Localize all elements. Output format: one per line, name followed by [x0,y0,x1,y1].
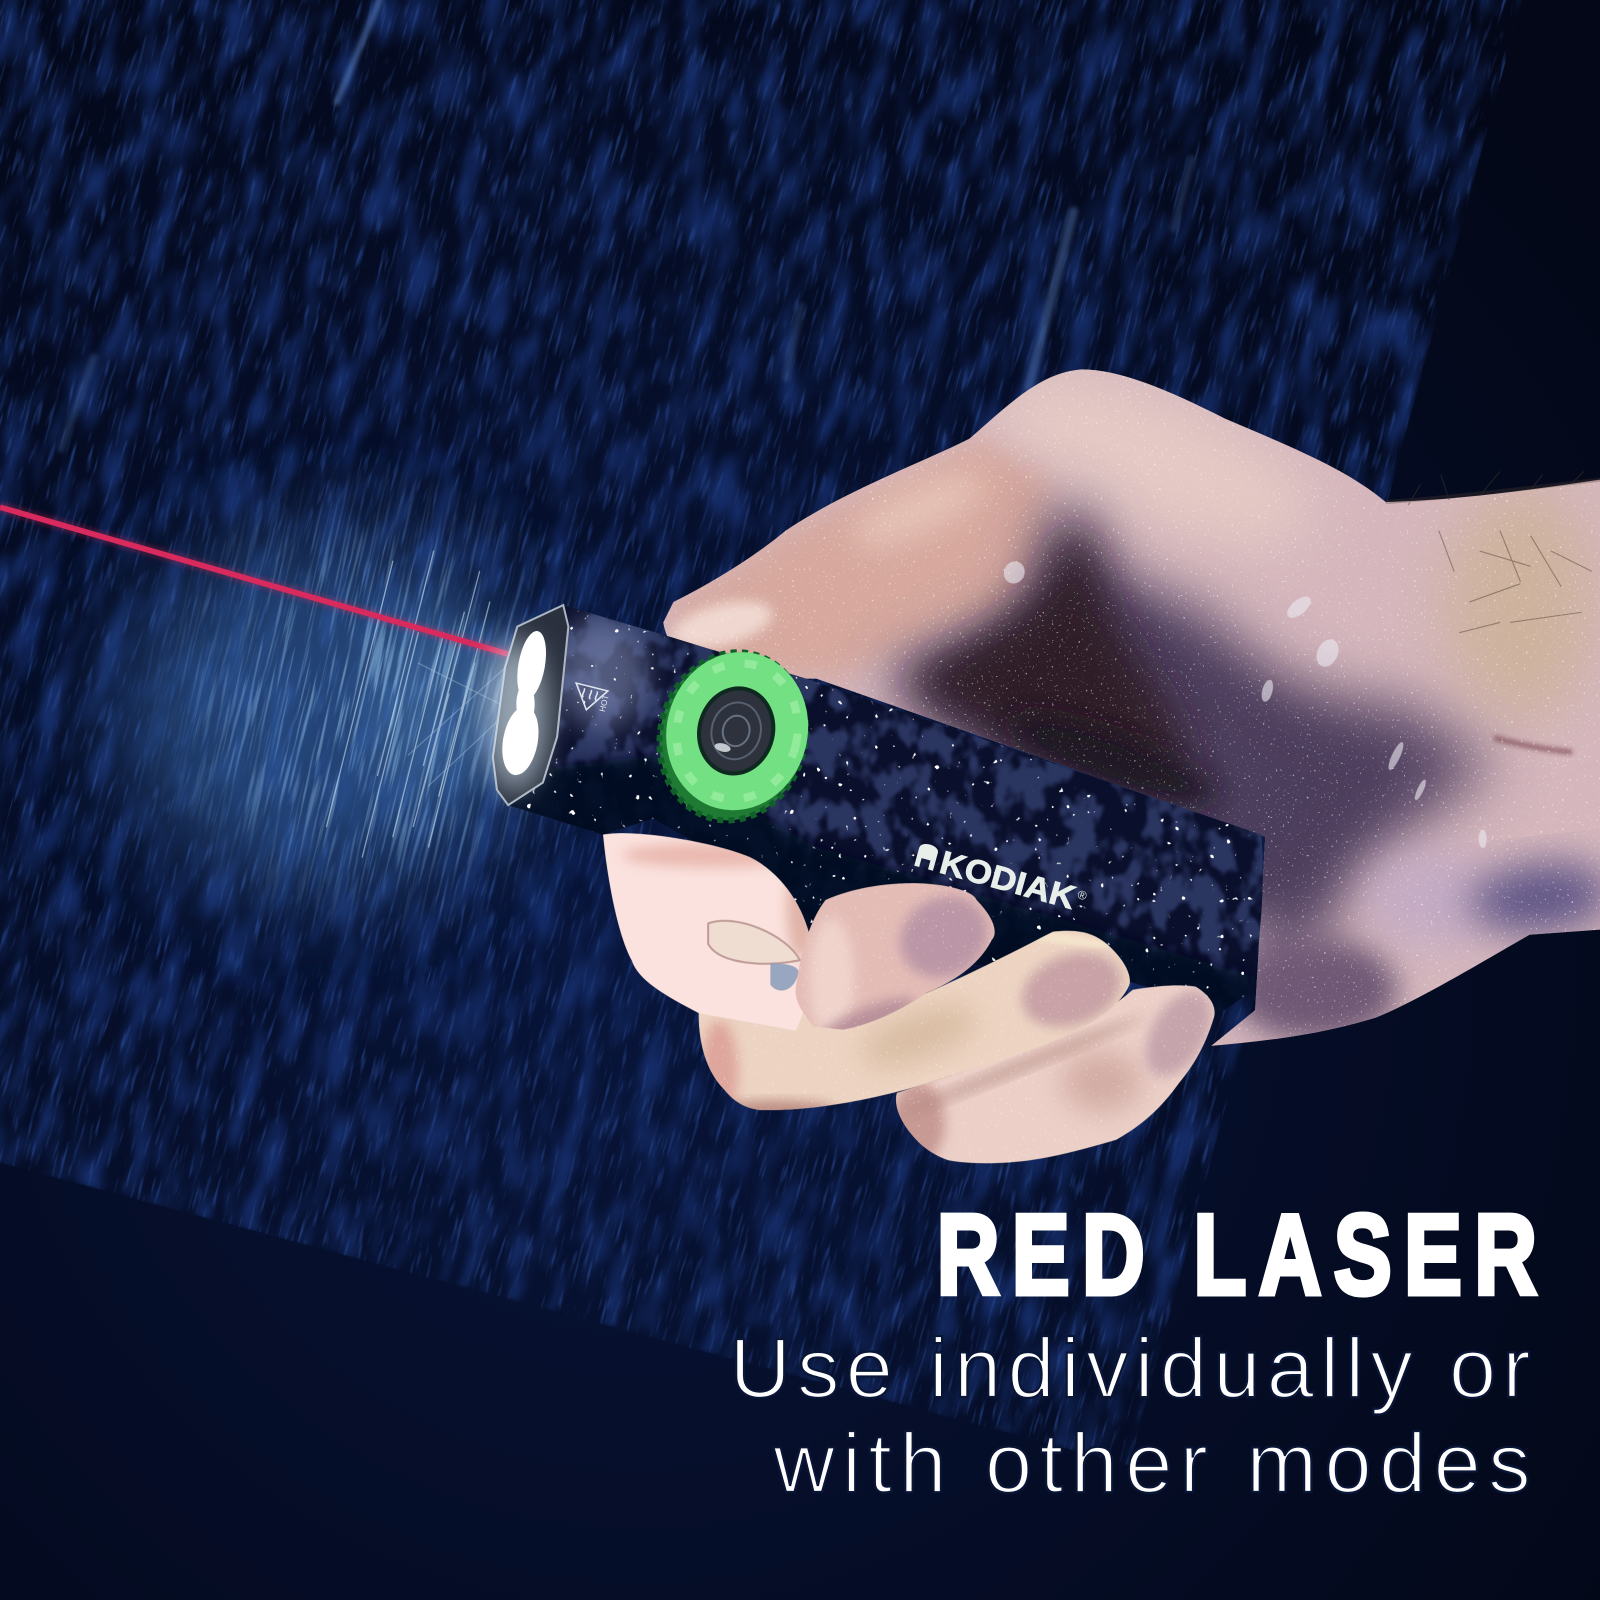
dial glow ring [650,637,825,825]
lit patch on palm heel [1365,849,1492,947]
water drop on nail [770,963,798,991]
middle finger [791,878,1002,1051]
dial gear teeth [642,637,824,836]
thumb nail [670,596,776,652]
brand logo: KODIAK: KODIAK [936,843,1080,916]
palm shadow [878,497,1498,1010]
icon: hot surface warning [570,683,612,715]
brand logo: KODIAK [912,837,1090,919]
subtitle line 2: with other modes [772,1415,1531,1510]
title: RED LASER: RED LASER [937,1190,1537,1319]
flashlight body [490,592,1276,1020]
index finger [603,833,809,1030]
palm dark core [903,526,1194,776]
wrist crease [1494,738,1572,752]
index fingernail [708,921,800,964]
logo bear mark [914,842,939,871]
dial centre button [688,678,785,784]
green dial [642,636,825,836]
flashlight [485,592,1276,1020]
subtitle line 1: Use individually or [730,1320,1531,1415]
knuckle highlight [980,370,1313,548]
red laser beam [0,507,522,658]
thumb [663,439,1051,679]
brand logo: KODIAK: ® [1076,887,1088,903]
lavender sheen near the head [556,617,648,730]
icon: hot surface warning: HOT [598,694,611,713]
pinky finger [896,985,1215,1164]
fingers [597,827,1225,1173]
ring finger [698,930,1130,1110]
flashlight head bezel [493,605,568,805]
arm hair [1386,471,1600,633]
shaded lower side of the body [490,755,1265,1020]
lower wrist shadow [1466,856,1600,940]
hand: palm and wrist [663,369,1600,1046]
LED glow [485,629,551,791]
water drops on the hand [1000,558,1487,848]
water spray glow in front of the light [70,469,586,944]
wrist skin [1444,485,1597,719]
